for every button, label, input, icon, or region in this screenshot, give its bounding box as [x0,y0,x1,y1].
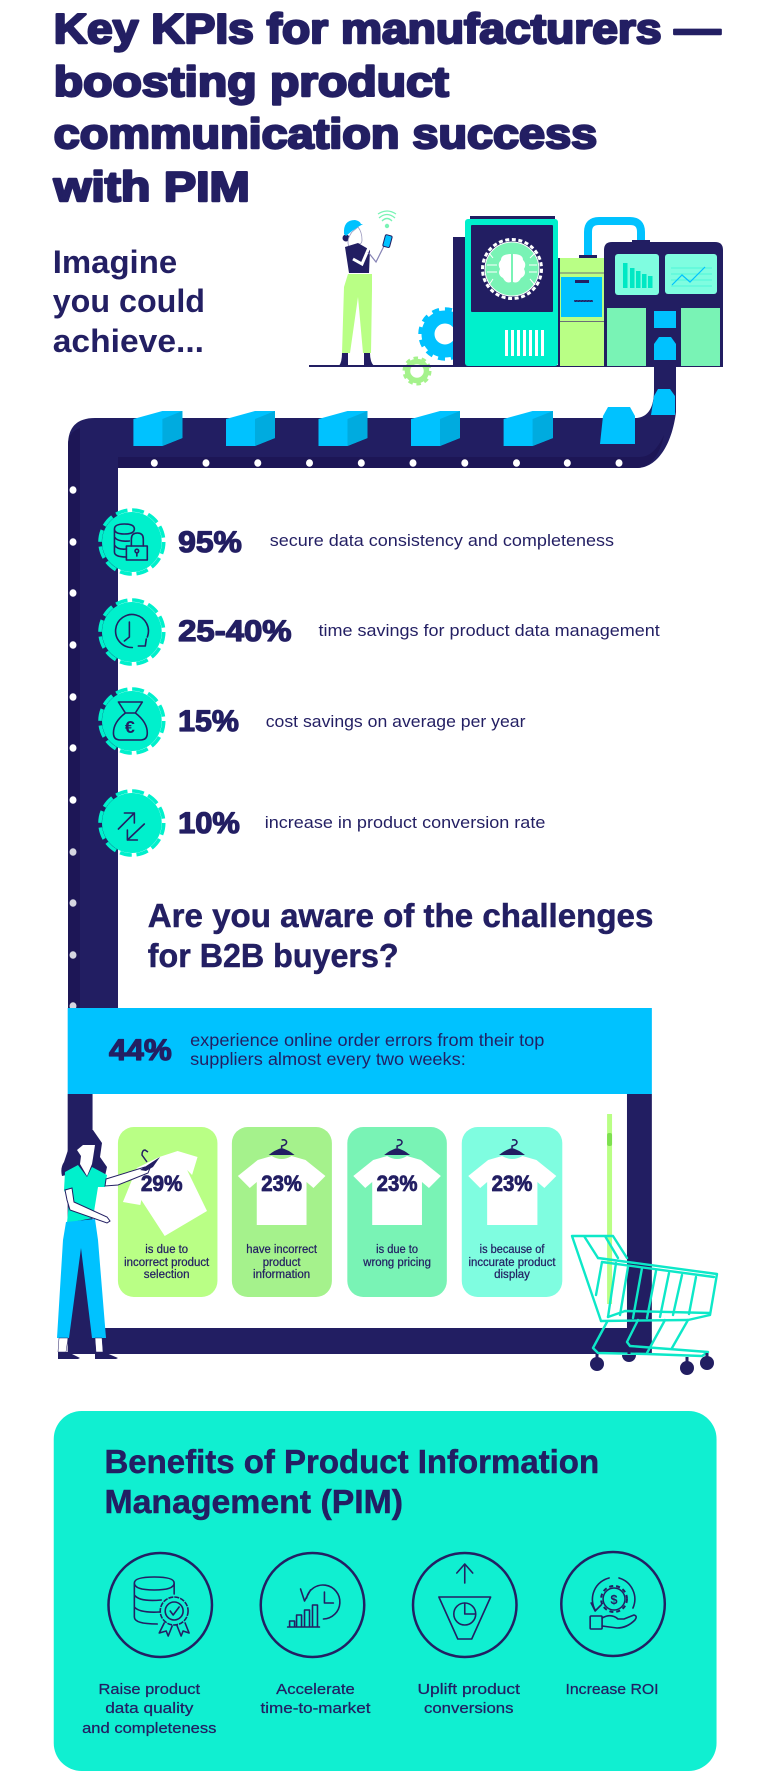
KPI row: 25-40% [100,600,660,664]
title [53,5,721,210]
panel heading: Benefits of Product Information [104,1443,599,1480]
icon: accelerate time-to-market [261,1553,364,1657]
subheading: imagine you could achieve: achieve... [53,323,204,359]
banner: 44% order errors [68,1008,652,1094]
shopping cart [572,1236,717,1375]
subheading: imagine you could achieve [53,244,205,359]
title: communication success [54,110,597,157]
card: 23% wrong pricing: is due to [376,1242,418,1256]
label: raise product data quality: Raise product [99,1681,201,1698]
KPI row: 10%: increase in product conversion rate [265,813,545,832]
KPI row: 95%: 95% [178,526,242,559]
heading: challenges for B2B buyers [148,897,653,974]
card: 23% inaccurate product display: inccurate product [468,1255,556,1269]
pipe [579,221,650,258]
label: raise product data quality: data quality [105,1700,194,1717]
subheading: imagine you could achieve: you could [53,283,205,319]
KPI row: 10%: 10% [178,807,240,840]
label: raise product data quality [82,1681,216,1737]
card: 29% incorrect product selection: incorrect product [124,1255,210,1269]
label: accelerate time-to-market: time-to-market [260,1700,371,1717]
label: uplift product conversions [417,1681,521,1717]
banner: 44% order errors: suppliers almost every two weeks: [190,1049,466,1069]
card: 29% incorrect product selection [118,1127,217,1297]
banner: 44% order errors: experience online order errors from their top [190,1030,544,1050]
card: 29% incorrect product selection: is due to [145,1242,188,1256]
KPI row: 15% [100,689,526,753]
card: 23% incorrect product information: have incorrect [246,1242,318,1256]
KPI row: 95% [100,510,614,574]
card: 29% incorrect product selection: selection [144,1267,190,1281]
card: 23% inaccurate product display [462,1127,562,1297]
icon: green gear [404,358,430,384]
panel: benefits of PIM [54,1411,717,1771]
label: accelerate time-to-market [260,1681,371,1717]
banner: 44% order errors: 44% [109,1034,172,1067]
KPI row: 15%: 15% [178,705,239,738]
label: increase ROI: Increase ROI [566,1681,659,1698]
icon: clock gear [100,600,164,664]
title: boosting product [54,58,449,105]
scrollbar [607,1114,612,1304]
card: 23% wrong pricing: wrong pricing [362,1255,431,1269]
worker with phone [339,211,396,366]
machine: green unit [558,258,605,366]
KPI row: 25-40%: time savings for product data management [318,621,660,640]
panel heading: Management (PIM) [104,1483,403,1520]
card: 23% inaccurate product display: is because of [480,1242,545,1256]
card: 23% inaccurate product display: display [494,1267,530,1281]
icon: data lock gear [100,510,164,574]
KPI row: 15%: cost savings on average per year [266,712,526,731]
icon: money bag gear [100,689,164,753]
machine: monitor unit [604,242,723,366]
title: with PIM [53,163,250,210]
label: accelerate time-to-market: Accelerate [276,1681,355,1698]
card: 23% wrong pricing: 23% [377,1171,417,1196]
subheading: imagine you could achieve: Imagine [53,244,177,280]
card: 23% incorrect product information: information [253,1267,310,1281]
heading: challenges for B2B buyers: for B2B buyers? [148,937,399,974]
card: 29% incorrect product selection: 29% [141,1171,183,1196]
heading: challenges for B2B buyers: Are you aware of the challenges [148,897,653,934]
card: 23% inaccurate product display: 23% [492,1171,532,1196]
ground line [309,365,723,367]
KPI row: 95%: secure data consistency and completeness [270,531,614,550]
label: uplift product conversions: Uplift product [417,1681,521,1698]
label: raise product data quality: and completeness [82,1720,216,1737]
icon: uplift conversions [413,1553,517,1657]
card: 23% incorrect product information [232,1127,332,1297]
card: 23% wrong pricing [347,1127,447,1297]
icon: increase ROI [561,1552,665,1656]
icon: money bag gear: € [125,717,135,737]
KPI row: 25-40%: 25-40% [178,615,292,648]
boxes on conveyor [133,389,675,446]
icon: increase ROI: $ [610,1592,618,1607]
factory illustration [309,211,723,384]
conveyor belt [68,366,676,1010]
woman shopper [57,1130,160,1359]
store frame [68,1094,652,1354]
icon: data quality [108,1553,212,1657]
label: uplift product conversions: conversions [424,1700,514,1717]
machine: brain unit [453,216,558,366]
card: 23% incorrect product information: product [263,1255,301,1269]
icon: arrows gear [100,791,164,855]
panel heading [104,1443,599,1520]
title: Key KPIs for manufacturers — [54,5,721,52]
KPI row: 10% [100,791,545,855]
icon: blue gear [420,310,470,358]
card: 23% incorrect product information: 23% [261,1171,302,1196]
